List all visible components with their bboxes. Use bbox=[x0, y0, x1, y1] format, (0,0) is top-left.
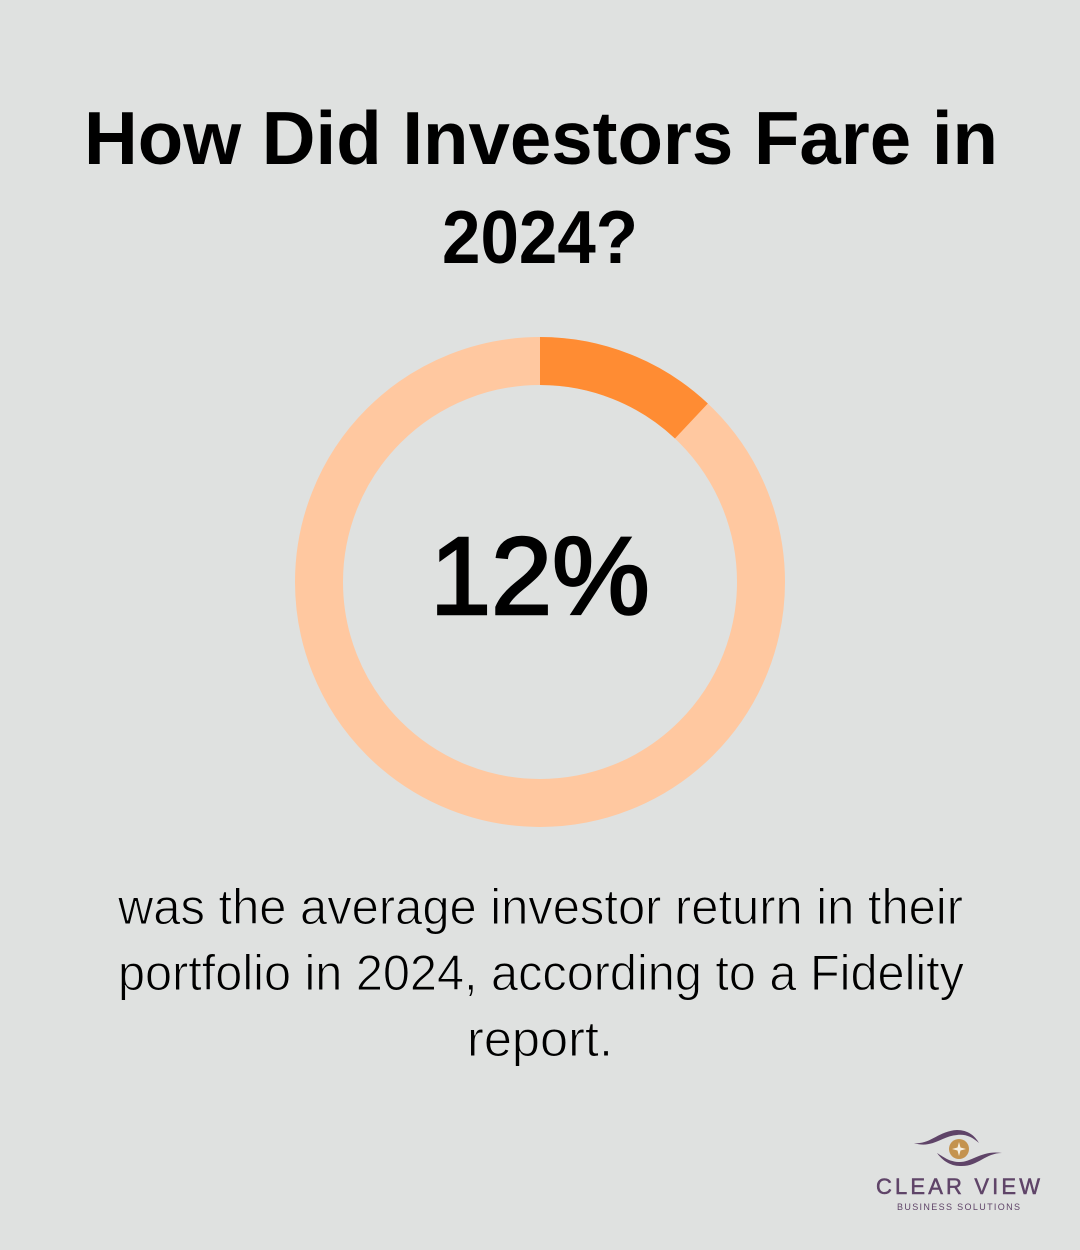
logo tagline: BUSINESS SOLUTIONS bbox=[897, 1202, 1020, 1212]
ring track bbox=[319, 361, 761, 803]
logo wordmark: CLEAR VIEW bbox=[876, 1174, 1040, 1199]
description text: report. bbox=[467, 1011, 613, 1067]
title bbox=[84, 96, 998, 279]
ring highlighted segment bbox=[540, 361, 691, 421]
description text: was the average investor return in their bbox=[117, 879, 963, 935]
logo: Clear View Business Solutions bbox=[876, 1130, 1040, 1212]
title: 2024? bbox=[442, 195, 638, 279]
donut chart: 12% bbox=[319, 361, 761, 803]
description text bbox=[117, 879, 964, 1067]
big number: 12% bbox=[430, 515, 650, 638]
description text: portfolio in 2024, according to a Fidelity bbox=[118, 945, 964, 1001]
icon: eye bbox=[914, 1130, 1002, 1166]
title: How Did Investors Fare in bbox=[84, 96, 998, 180]
